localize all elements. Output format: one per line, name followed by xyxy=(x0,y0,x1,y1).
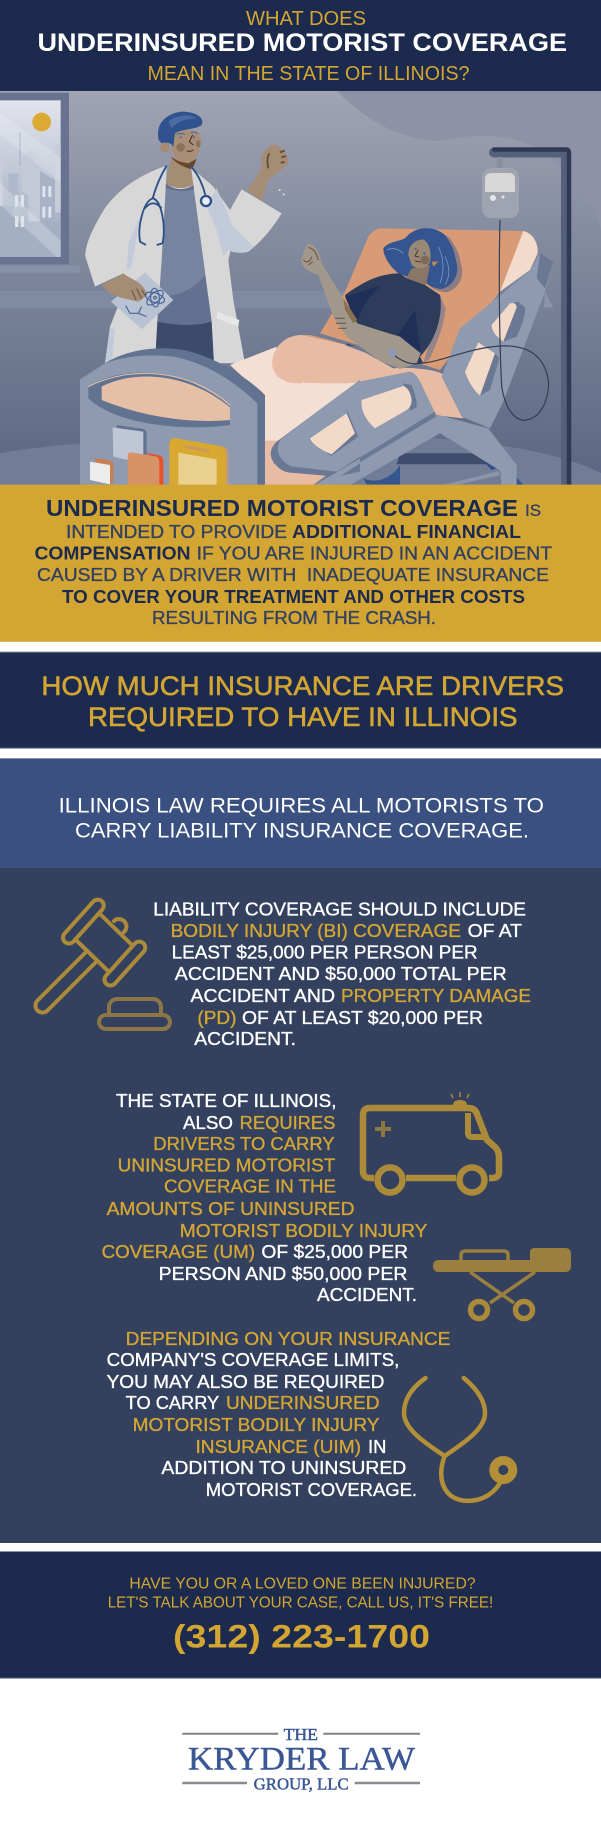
icon: stretcher xyxy=(433,1248,571,1318)
text: underinsured motorist requirement: COMPANY'S COVERAGE LIMITS, xyxy=(107,1350,399,1370)
panel: call to action: LET'S TALK ABOUT YOUR CASE, CALL US, IT'S FREE! xyxy=(108,1594,493,1611)
phone number: (312) 223-1700 xyxy=(173,1618,430,1654)
panel: how much insurance heading xyxy=(0,652,601,749)
text: liability coverage: ACCIDENT AND xyxy=(190,986,335,1006)
panel: Illinois law banner xyxy=(0,758,601,868)
bed side rail xyxy=(328,372,517,485)
text: liability coverage: OF AT xyxy=(468,921,522,941)
text: liability coverage: LIABILITY COVERAGE SHOULD INCLUDE xyxy=(153,900,526,920)
text: uninsured motorist requirement: MOTORIST BODILY INJURY xyxy=(180,1221,427,1241)
logo: The Kryder Law Group: GROUP, LLC xyxy=(254,1774,349,1793)
text: underinsured motorist requirement: ADDITION TO UNINSURED xyxy=(161,1458,406,1478)
text: liability coverage: PROPERTY DAMAGE xyxy=(341,986,531,1006)
text: uninsured motorist requirement: ALSO xyxy=(183,1113,233,1133)
logo: The Kryder Law Group: THE xyxy=(284,1725,318,1744)
text: liability coverage: (PD) xyxy=(197,1008,236,1028)
heading line: underinsured motorist coverage: UNDERINSURED MOTORIST COVERAGE xyxy=(38,29,567,57)
text: liability coverage: OF AT LEAST $20,000 PER xyxy=(242,1008,483,1028)
panel: title header xyxy=(0,0,601,91)
IV pole and bag xyxy=(482,150,569,485)
text: underinsured motorist requirement: MOTORIST BODILY INJURY xyxy=(133,1415,380,1435)
bed back rest xyxy=(320,228,523,370)
definition text: COMPENSATION xyxy=(34,544,190,564)
text: underinsured motorist requirement: IN xyxy=(368,1437,386,1457)
panel: coverage details xyxy=(0,868,601,1543)
text: uninsured motorist requirement: THE STATE OF ILLINOIS, xyxy=(116,1091,336,1111)
logo: The Kryder Law Group xyxy=(182,1725,420,1793)
text: uninsured motorist requirement: PERSON AND $50,000 PER xyxy=(159,1264,407,1284)
panel: how much insurance heading: REQUIRED TO HAVE IN ILLINOIS xyxy=(88,702,518,732)
definition text: IS xyxy=(525,501,541,520)
definition text: IF YOU ARE INJURED IN AN ACCIDENT xyxy=(197,544,552,564)
heading line: mean in Illinois: MEAN IN THE STATE OF ILLINOIS? xyxy=(148,63,470,85)
under-bed frame xyxy=(364,453,523,485)
text: uninsured motorist requirement: COVERAGE (UM) xyxy=(102,1242,255,1262)
panel: call to action: HAVE YOU OR A LOVED ONE BEEN INJURED? xyxy=(129,1576,476,1593)
text: uninsured motorist requirement: UNINSURED MOTORIST xyxy=(118,1156,335,1176)
text: uninsured motorist requirement xyxy=(102,1091,427,1305)
definition text: TO COVER YOUR TREATMENT AND OTHER COSTS xyxy=(62,587,525,607)
logo: The Kryder Law Group: KRYDER LAW xyxy=(188,1741,416,1777)
text: underinsured motorist requirement: MOTORIST COVERAGE. xyxy=(206,1480,417,1500)
heading line: what does: WHAT DOES xyxy=(246,8,366,30)
text: uninsured motorist requirement: REQUIRES xyxy=(240,1113,335,1133)
definition text: INTENDED TO PROVIDE xyxy=(66,522,287,542)
text: liability coverage: LEAST $25,000 PER PERSON PER xyxy=(172,943,478,963)
illustration: doctor and patient in hospital room xyxy=(0,91,601,485)
doctor xyxy=(85,112,288,363)
panel: Illinois law banner: CARRY LIABILITY INSURANCE COVERAGE. xyxy=(75,820,529,843)
icon: ambulance xyxy=(363,1092,499,1192)
text: uninsured motorist requirement: DRIVERS TO CARRY xyxy=(153,1134,335,1154)
panel: Illinois law banner: ILLINOIS LAW REQUIRES ALL MOTORISTS TO xyxy=(59,795,544,818)
patient arm xyxy=(301,243,421,369)
panel: call to action xyxy=(0,1551,601,1679)
text: underinsured motorist requirement: UNDERINSURED xyxy=(226,1393,380,1413)
bed footboard with folders xyxy=(80,348,265,485)
text: liability coverage: BODILY INJURY (BI) COVERAGE xyxy=(171,921,461,941)
window xyxy=(0,93,80,273)
icon: gavel xyxy=(35,897,170,1029)
text: liability coverage: ACCIDENT. xyxy=(194,1029,296,1049)
icon: stethoscope xyxy=(404,1378,513,1501)
text: uninsured motorist requirement: AMOUNTS OF UNINSURED xyxy=(107,1199,354,1219)
definition text: RESULTING FROM THE CRASH. xyxy=(152,608,436,628)
text: liability coverage xyxy=(153,900,531,1049)
text: uninsured motorist requirement: COVERAGE IN THE xyxy=(164,1177,336,1197)
blanket foot and rail end xyxy=(230,335,360,485)
patient and hospital bed xyxy=(280,220,553,485)
text: liability coverage: ACCIDENT AND $50,000 TOTAL PER xyxy=(175,964,507,984)
text: underinsured motorist requirement: INSURANCE (UIM) xyxy=(196,1437,361,1457)
text: underinsured motorist requirement xyxy=(107,1329,450,1500)
definition text: CAUSED BY A DRIVER WITH INADEQUATE INSURANCE xyxy=(37,565,549,585)
definition text: UNDERINSURED MOTORIST COVERAGE xyxy=(46,495,518,521)
blanket xyxy=(320,338,464,418)
text: underinsured motorist requirement: YOU MAY ALSO BE REQUIRED xyxy=(107,1372,384,1392)
text: uninsured motorist requirement: ACCIDENT. xyxy=(317,1285,417,1305)
definition text: ADDITIONAL FINANCIAL xyxy=(292,522,521,542)
panel: how much insurance heading: HOW MUCH INSURANCE ARE DRIVERS xyxy=(41,671,564,701)
text: underinsured motorist requirement: TO CARRY xyxy=(126,1393,219,1413)
folders xyxy=(90,425,228,485)
definition text xyxy=(34,495,552,628)
text: uninsured motorist requirement: OF $25,000 PER xyxy=(261,1242,408,1262)
patient upper body xyxy=(345,228,462,363)
IV tube xyxy=(395,220,549,420)
panel: gold definition block xyxy=(0,485,601,642)
bed back rail xyxy=(442,253,553,428)
text: underinsured motorist requirement: DEPENDING ON YOUR INSURANCE xyxy=(126,1329,450,1349)
